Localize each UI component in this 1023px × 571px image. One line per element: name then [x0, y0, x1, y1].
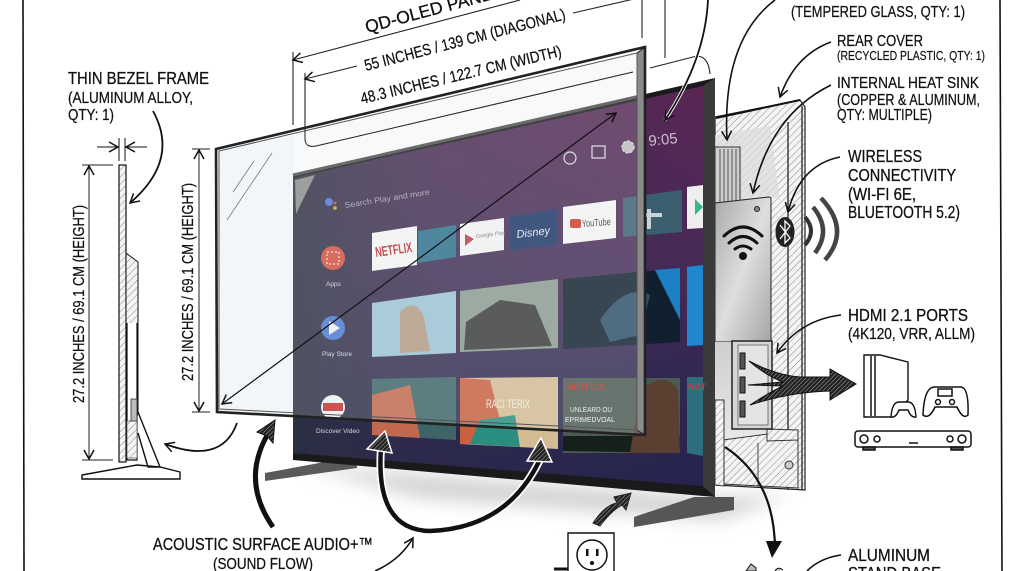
label: HDMI ports: HDMI 2.1 PORTS	[848, 305, 968, 325]
content tile row 3: RACI TERIX	[486, 397, 530, 411]
app tile: Prime	[418, 225, 456, 263]
video button: Discover Video	[316, 428, 360, 435]
video button	[316, 395, 360, 435]
arrow: stand base label	[807, 555, 841, 571]
label: HDMI ports: (4K120, VRR, ALLM)	[848, 326, 975, 343]
label: thin bezel frame: (ALUMINUM ALLOY,	[68, 90, 193, 107]
glass top clear area	[293, 51, 640, 175]
glass left clear area	[217, 132, 293, 416]
dimension: width lines	[293, 0, 710, 125]
console controller	[891, 402, 916, 417]
label: internal heat sink: (COPPER & ALUMINUM,	[837, 92, 980, 109]
arrow: bezel frame	[130, 111, 162, 203]
panel: television body	[293, 78, 715, 497]
side view stand	[82, 412, 180, 479]
label: rear cover: REAR COVER	[837, 33, 923, 50]
panel: HDMI ports	[732, 341, 772, 429]
callout arrows: right side	[665, 0, 841, 353]
content tile row 3: UNLEARD OU	[570, 407, 612, 414]
status icons	[564, 141, 634, 164]
search bar text: Search Play and more	[344, 188, 431, 210]
clock: 9:05	[648, 130, 678, 150]
apps button	[321, 246, 345, 288]
label: thin bezel frame: QTY: 1)	[68, 107, 114, 124]
arrow: rear cover	[780, 42, 831, 97]
TV stand feet	[265, 461, 734, 527]
arrow: audio lower	[375, 538, 413, 571]
arrow halo: to QD-OLED panel	[665, 0, 708, 120]
label: tempered glass: (TEMPERED GLASS, QTY: 1)	[791, 4, 965, 21]
label: wireless connectivity: BLUETOOTH 5.2)	[848, 202, 960, 222]
app tile: YouTube	[563, 200, 616, 244]
icon: bluetooth with waves	[776, 198, 837, 260]
label: acoustic surface audio	[153, 534, 373, 571]
label: width size: 48.3 INCHES / 122.7 CM (WIDTH)	[359, 43, 563, 108]
arrow: power to TV	[593, 493, 631, 526]
arrow: HDMI	[777, 315, 841, 353]
label: HDMI ports	[848, 305, 975, 343]
dimension: front height: 27.2 INCHES / 69.1 CM (HEIGHT)	[180, 183, 197, 381]
icon: wall outlet	[554, 533, 614, 571]
label: thin bezel frame	[68, 68, 209, 124]
label: thin bezel frame: THIN BEZEL FRAME	[68, 68, 209, 88]
play store button: Play Store	[322, 351, 352, 358]
arrow: glass to side view	[165, 423, 237, 451]
assistant icon	[325, 198, 337, 210]
content tile row 3	[372, 377, 707, 456]
dimension: side height: 27.2 INCHES / 69.1 CM (HEIGHT)	[71, 205, 88, 403]
icon: stand base hardware	[746, 564, 783, 571]
internal heat sink plate	[715, 197, 771, 342]
app tile: Google Play	[460, 218, 506, 256]
content tile row 3: NET	[688, 382, 707, 392]
dimension: bezel thickness	[97, 138, 147, 161]
label: wireless connectivity	[848, 146, 960, 222]
arrow: tempered glass	[727, 0, 775, 140]
arrow: diagonal dimension	[222, 113, 616, 404]
arrow: stand base	[725, 447, 782, 558]
app tile: Netflix	[372, 226, 417, 271]
label: rear cover	[837, 33, 985, 63]
glass reflection strokes	[227, 153, 272, 220]
icon: game controller	[923, 387, 968, 416]
label: internal heat sink	[837, 75, 980, 124]
panel: rear cover	[715, 100, 805, 490]
icon: soundbar	[855, 431, 971, 450]
play store button	[321, 316, 352, 358]
screen corner highlight	[295, 175, 315, 214]
arrow: audio from label to screen edge	[255, 420, 275, 527]
lower grey housing	[715, 342, 772, 440]
floor shadow	[300, 465, 790, 520]
screw	[754, 206, 760, 212]
apps button: Apps	[326, 281, 342, 288]
app tile: Netflix: NETFLIX	[374, 239, 413, 260]
heat sink fins	[715, 147, 740, 203]
app tile: Disney: Disney	[516, 225, 552, 241]
label: wireless connectivity: WIRELESS	[848, 146, 922, 166]
label: wireless connectivity: (WI-FI 6E,	[848, 184, 916, 204]
lower housing	[723, 430, 798, 488]
label: internal heat sink: QTY: MULTIPLE)	[837, 107, 932, 124]
TV top bezel seen through glass	[293, 96, 640, 175]
inner panel outline	[305, 72, 633, 146]
app tile: play	[687, 185, 703, 229]
label: wireless connectivity: CONNECTIVITY	[848, 165, 956, 185]
app tile: Google Play: Google Play	[476, 230, 506, 240]
side view of TV	[82, 165, 180, 479]
label: acoustic surface audio: ACOUSTIC SURFACE AUDIO+™	[153, 534, 373, 554]
page frame: left rule	[23, 0, 24, 571]
arrow: wireless	[788, 157, 840, 212]
arrow: sound flow double arc	[367, 431, 552, 531]
smart TV interface	[316, 130, 707, 456]
arrow: to QD-OLED panel	[665, 0, 708, 120]
icon: wifi	[724, 227, 762, 258]
label: aluminum stand base: ALUMINUM	[848, 545, 930, 565]
label: rear cover: (RECYCLED PLASTIC, QTY: 1)	[837, 49, 985, 63]
app tile: Disney	[510, 209, 557, 251]
content tile row 3: EPRIMEDVOAL	[565, 417, 615, 424]
page frame: right rule	[1000, 0, 1002, 571]
app tile: add	[623, 190, 682, 237]
dimension: side height	[71, 165, 113, 460]
dimension: front height	[180, 149, 210, 412]
content tile row 3: NETFLIX	[567, 382, 604, 392]
app tile: YouTube: YouTube	[581, 217, 611, 230]
icon: game console	[864, 355, 916, 417]
label: internal heat sink: INTERNAL HEAT SINK	[837, 75, 979, 92]
panel: tempered glass front	[216, 47, 645, 435]
arrow: HDMI signal to devices	[748, 361, 856, 405]
glass frame	[637, 47, 645, 435]
arrow: heat sink	[753, 85, 831, 193]
content tile row 2	[372, 265, 703, 357]
